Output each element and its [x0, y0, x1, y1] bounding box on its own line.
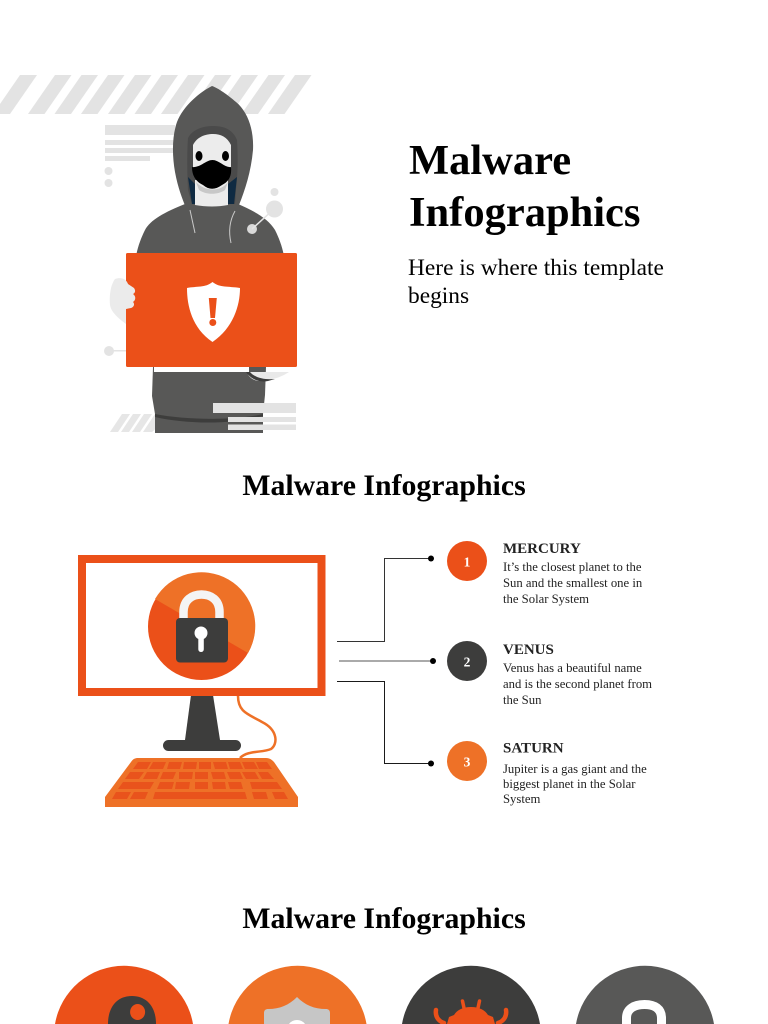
item three: Saturn [447, 740, 647, 806]
keyboard [105, 758, 298, 807]
badge 1: 1 [464, 554, 471, 570]
Mercury description: the Solar System [503, 592, 589, 606]
connector to item two [339, 658, 436, 664]
heading: section one: Malware Infographics [242, 469, 526, 502]
hacker torso [152, 367, 266, 418]
bottom stripes [110, 414, 160, 432]
Saturn description: biggest planet in the Solar [503, 777, 636, 791]
laptop bottom highlight [154, 367, 249, 372]
subtitle line two: begins [408, 283, 469, 309]
item two: Venus [447, 641, 652, 707]
icon circle: webcam [55, 966, 193, 1024]
stand base [163, 740, 241, 751]
badge 1 [447, 541, 487, 581]
title line two: Infographics [409, 189, 640, 236]
hacker legs [155, 395, 263, 433]
connector lines [337, 556, 436, 766]
badge 3 [447, 741, 487, 781]
icon circle: padlock [576, 966, 714, 1024]
item one: Mercury [447, 541, 643, 606]
connector to item one [337, 556, 434, 642]
padlock disc [148, 573, 255, 680]
mask [192, 160, 231, 189]
illustration: hooded hacker holding laptop [0, 75, 312, 433]
bottom-right bars [213, 403, 296, 430]
Venus description: Venus has a beautiful name [503, 661, 642, 675]
icon: padlock [176, 594, 228, 662]
badge 2: 2 [464, 654, 471, 670]
network node on shoulder [247, 209, 274, 234]
Mercury description: Sun and the smallest one in [503, 576, 643, 590]
Mercury description: It’s the closest planet to the [503, 560, 642, 574]
Venus description: and is the second planet from [503, 677, 652, 691]
laptop panel [126, 253, 297, 367]
icon circle: shield [228, 966, 366, 1024]
hacker lower hand [247, 372, 289, 381]
neck [195, 180, 228, 206]
hood [173, 86, 253, 212]
Venus label: VENUS [503, 642, 554, 658]
Saturn description [503, 762, 647, 806]
Saturn label: SATURN [503, 740, 564, 756]
Venus description: the Sun [503, 693, 542, 707]
cable [238, 696, 275, 758]
face [193, 134, 231, 172]
icon circle: bug [402, 966, 540, 1024]
icon: shield with exclamation [187, 282, 240, 342]
Mercury description [503, 560, 643, 606]
background text bars and dots [104, 125, 283, 356]
Mercury label: MERCURY [503, 541, 581, 557]
Saturn description: System [503, 792, 540, 806]
monitor stand [185, 695, 220, 740]
subtitle: Here is where this template [408, 255, 664, 281]
neck shadow sides [188, 177, 237, 204]
illustration: computer with padlock [82, 559, 322, 807]
hood inner [187, 126, 238, 204]
hoodie strings [190, 210, 235, 243]
Venus description [503, 661, 652, 707]
badge 3: 3 [464, 754, 471, 770]
hacker shoulders [136, 204, 284, 256]
Saturn description: Jupiter is a gas giant and the [503, 762, 647, 776]
title: Malware [409, 137, 571, 184]
heading: section two: Malware Infographics [242, 902, 526, 935]
decorative stripes top [0, 75, 312, 114]
hand left with fingers [110, 278, 135, 324]
monitor frame [82, 559, 322, 692]
connector to item three [337, 682, 434, 766]
eyes [196, 151, 202, 161]
badge 2 [447, 641, 487, 681]
